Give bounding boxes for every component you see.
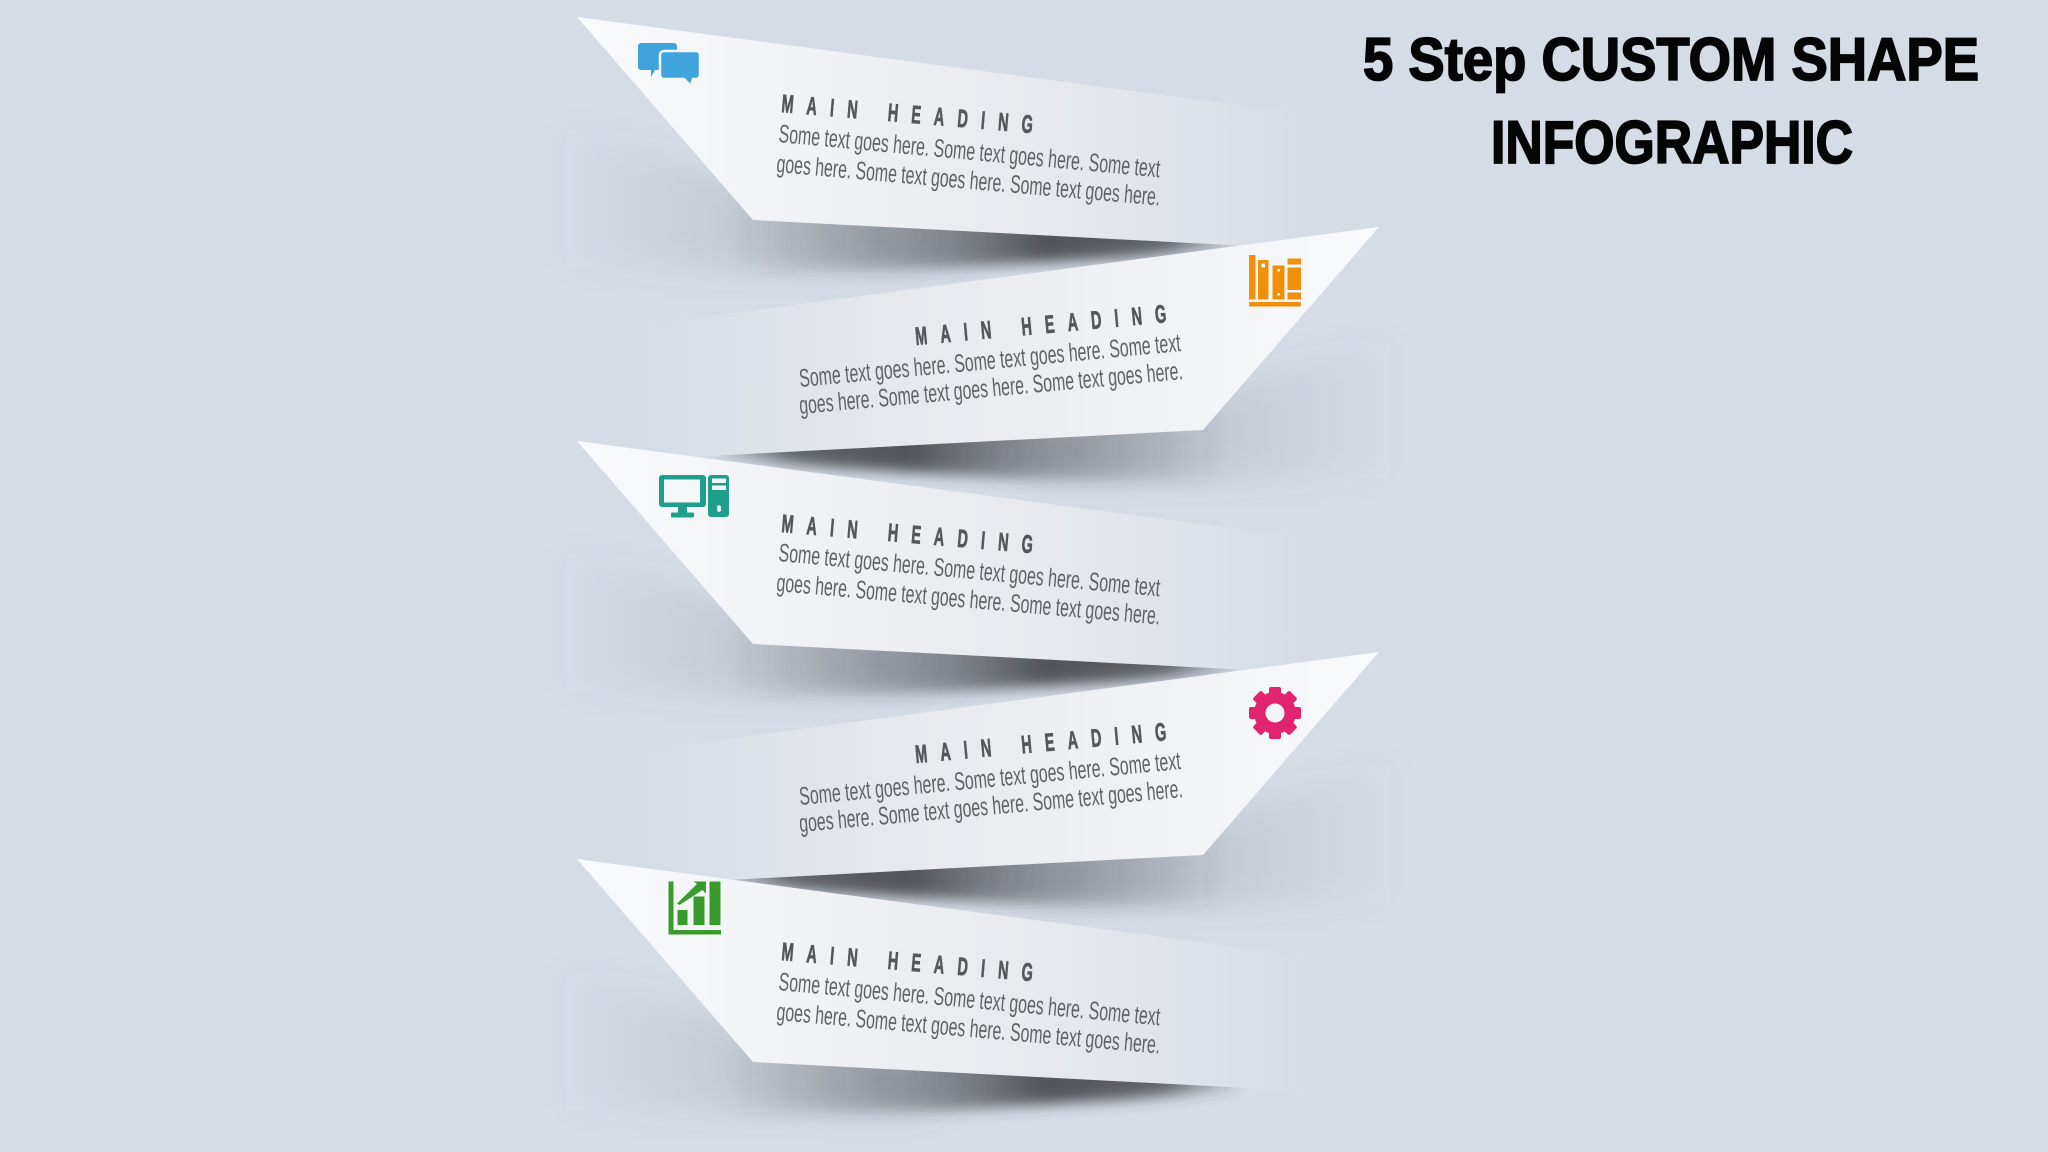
body text: goes here. Some text goes here. Some text goes here.	[775, 150, 1161, 212]
title	[1363, 26, 1979, 176]
body text: Some text goes here. Some text goes here. Some text	[777, 539, 1161, 602]
body text	[775, 539, 1161, 631]
panel: step 5	[552, 859, 1320, 1114]
step 5 ribbon shape with shadow	[552, 859, 1320, 1114]
body text: goes here. Some text goes here. Some text goes here.	[775, 998, 1161, 1060]
icon: growth chart	[668, 882, 721, 934]
step 1 ribbon shape with shadow	[552, 17, 1320, 272]
body text: Some text goes here. Some text goes here. Some text	[798, 747, 1182, 811]
heading: MAIN HEADING	[914, 300, 1168, 351]
body text	[798, 747, 1184, 838]
body text	[775, 120, 1161, 212]
icon: books on shelf	[1249, 255, 1301, 306]
icon: chat bubbles	[638, 43, 700, 86]
panel: step 1	[552, 17, 1320, 272]
body text: goes here. Some text goes here. Some text goes here.	[798, 357, 1184, 420]
step 4 ribbon shape with shadow	[636, 652, 1404, 907]
heading: MAIN HEADING	[780, 90, 1034, 139]
heading: MAIN HEADING	[780, 938, 1034, 987]
icon: gear	[1249, 687, 1301, 739]
panel: step 2	[636, 227, 1404, 482]
icon: desktop computer	[659, 475, 729, 518]
panel: step 4	[636, 652, 1404, 907]
body text: Some text goes here. Some text goes here. Some text	[777, 120, 1161, 183]
step 3 ribbon shape with shadow	[552, 441, 1320, 696]
heading: MAIN HEADING	[780, 510, 1034, 559]
panel: step 3	[552, 441, 1320, 696]
body text	[775, 968, 1161, 1060]
step 2 ribbon shape with shadow	[636, 227, 1404, 482]
body text	[798, 329, 1184, 420]
body text: goes here. Some text goes here. Some text goes here.	[798, 775, 1184, 838]
body text: goes here. Some text goes here. Some text goes here.	[775, 569, 1161, 631]
title: 5 Step CUSTOM SHAPE	[1363, 26, 1979, 93]
body text: Some text goes here. Some text goes here. Some text	[798, 329, 1182, 393]
heading: MAIN HEADING	[914, 718, 1168, 769]
body text: Some text goes here. Some text goes here. Some text	[777, 968, 1161, 1031]
title: INFOGRAPHIC	[1491, 109, 1853, 176]
